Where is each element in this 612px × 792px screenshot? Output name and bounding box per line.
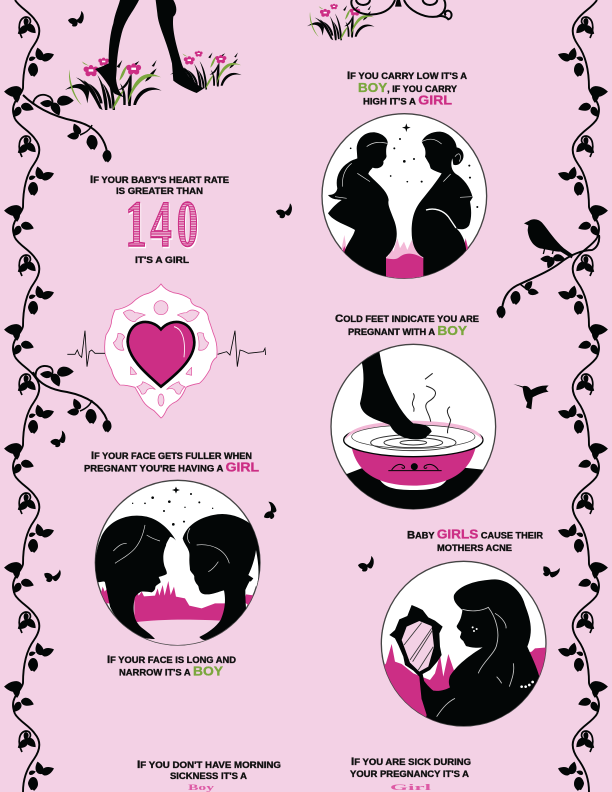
text: cold feet	[335, 313, 479, 338]
word: Boy: Boy	[188, 783, 214, 792]
text: face long: NARROW IT'S A BOY	[119, 664, 223, 678]
text: girls cause acne	[407, 526, 544, 553]
text: carry low or high: BOY, IF YOU CARRY	[358, 80, 457, 95]
text: cold feet: COLD FEET INDICATE YOU ARE	[335, 313, 479, 325]
number: 140: 140	[125, 188, 198, 260]
text: sick during pregnancy: YOUR PREGNANCY IT'S A	[350, 769, 470, 779]
doily	[105, 284, 217, 418]
left vine border	[4, 0, 55, 792]
text: no morning sickness: IF YOU DON'T HAVE MORNING	[137, 759, 281, 771]
text: heart rate: IF YOUR BABY'S HEART RATE	[90, 174, 229, 186]
text: sick during pregnancy	[350, 756, 471, 792]
illustration: foot in bowl in circle	[331, 344, 496, 517]
word: Girl: Girl	[390, 783, 433, 792]
lower left vine branch	[33, 366, 112, 433]
heartbeat lines	[67, 331, 266, 367]
steam	[412, 373, 451, 433]
text: no morning sickness: SICKNESS IT'S A	[170, 771, 248, 781]
icon: bird	[524, 219, 573, 258]
text: face long: IF YOUR FACE IS LONG AND	[107, 654, 236, 666]
text: carry low or high: IF YOU CARRY LOW IT'S A	[347, 70, 468, 82]
icon: grass clump top centre	[307, 4, 375, 40]
icon: grass clump left	[65, 58, 162, 110]
illustration: two faces in circle	[95, 480, 267, 648]
top scroll ornament	[351, 0, 452, 19]
text: carry low or high: HIGH IT'S A GIRL	[363, 92, 452, 108]
text: face long	[107, 654, 236, 678]
mirror	[389, 605, 443, 700]
text: no morning sickness	[137, 759, 281, 792]
bowl ornament	[388, 464, 442, 471]
text: heart rate	[90, 174, 229, 265]
heart	[128, 322, 194, 387]
text: face fuller: PREGNANT YOU'RE HAVING A GIRL	[84, 460, 259, 474]
right vine branch with bird	[496, 219, 599, 319]
illustration: woman with mirror in circle	[378, 561, 548, 730]
text: heart rate: IS GREATER THAN	[116, 186, 203, 196]
icon: hummingbird	[513, 384, 549, 409]
illustration: pregnant women in circle	[322, 114, 487, 283]
legs silhouette	[95, 0, 204, 97]
icon: grass clump right	[170, 51, 242, 90]
text: face fuller: IF YOUR FACE GETS FULLER WHEN	[91, 450, 252, 462]
upper left vine branch	[23, 95, 112, 163]
heart icon with doily and heartbeat lines	[67, 284, 266, 418]
legs with grass and flowers	[65, 0, 242, 110]
right vine border	[557, 0, 608, 792]
text: cold feet: PREGNANT WITH A BOY	[348, 323, 467, 338]
text: sick during pregnancy: IF YOU ARE SICK DURING	[351, 756, 471, 768]
text: girls cause acne: MOTHERS ACNE	[437, 543, 512, 553]
text: heart rate: IT'S A GIRL	[135, 255, 190, 265]
text: face fuller	[84, 450, 259, 474]
text: carry low or high	[347, 70, 468, 108]
text: girls cause acne: BABY GIRLS CAUSE THEIR	[407, 526, 544, 542]
butterflies	[43, 12, 561, 585]
